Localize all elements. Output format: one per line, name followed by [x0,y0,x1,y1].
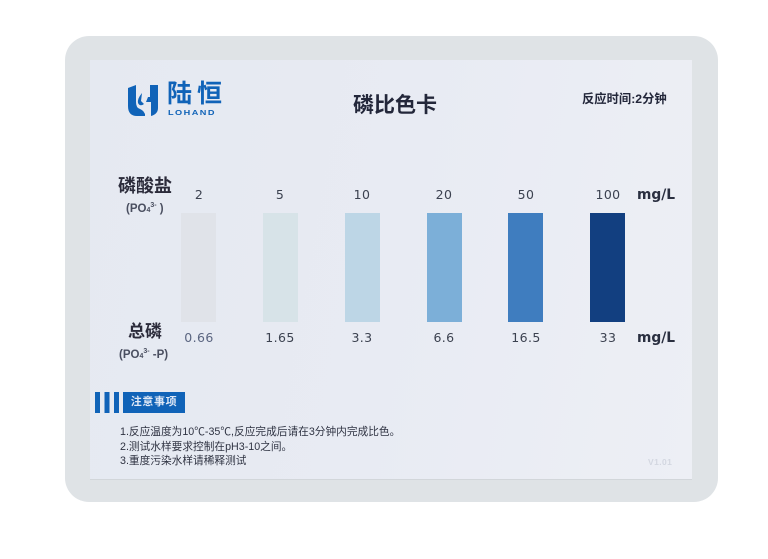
card frame [65,36,718,502]
value 2: 2 [195,187,203,202]
value 5: 5 [276,187,284,202]
phosphate values [195,187,675,203]
title: 磷比色卡 [353,94,437,117]
value 100: 100 [595,187,621,202]
total phosphorus values [184,330,675,346]
notes text: 2.测试水样要求控制在pH3-10之间。 [120,440,292,452]
row label: total phosphorus: 总磷 [128,322,162,341]
swatch 100 [590,213,625,322]
icon: three bars [95,392,119,413]
notice label: 注意事项 [131,396,177,408]
notes text [120,426,400,467]
swatch 10 [345,213,380,322]
notice heading [95,392,185,413]
card paper panel [90,60,692,480]
logo [128,80,227,117]
value 0.66: 0.66 [184,330,214,345]
value 50: 50 [518,187,534,202]
notice label [123,392,185,413]
value 16.5: 16.5 [511,330,541,345]
value 10: 10 [354,187,370,202]
unit: mg/L [637,187,675,203]
swatch 50 [508,213,543,322]
version: V1.01 [648,457,672,467]
notes text: 3.重度污染水样请稀释测试 [120,455,246,467]
value 3.3: 3.3 [351,330,373,345]
logo text chinese: 陆恒 [167,80,227,108]
row formula: total phosphorus: (PO43- -P) [119,348,168,361]
row label: phosphate: 磷酸盐 [118,176,172,196]
value 20: 20 [436,187,452,202]
value 33: 33 [600,330,616,345]
value 1.65: 1.65 [265,330,295,345]
reaction time: 反应时间:2分钟 [582,92,667,106]
colour swatches [181,213,625,322]
swatch 5 [263,213,298,322]
value 6.6: 6.6 [433,330,455,345]
icon: logo mark [128,85,158,116]
row formula: phosphate: (PO43- ) [126,202,164,215]
unit: mg/L [637,330,675,346]
swatch 20 [427,213,462,322]
logo text latin: LOHAND [168,108,216,117]
swatch 2 [181,213,216,322]
notes text: 1.反应温度为10℃-35℃,反应完成后请在3分钟内完成比色。 [120,426,400,438]
